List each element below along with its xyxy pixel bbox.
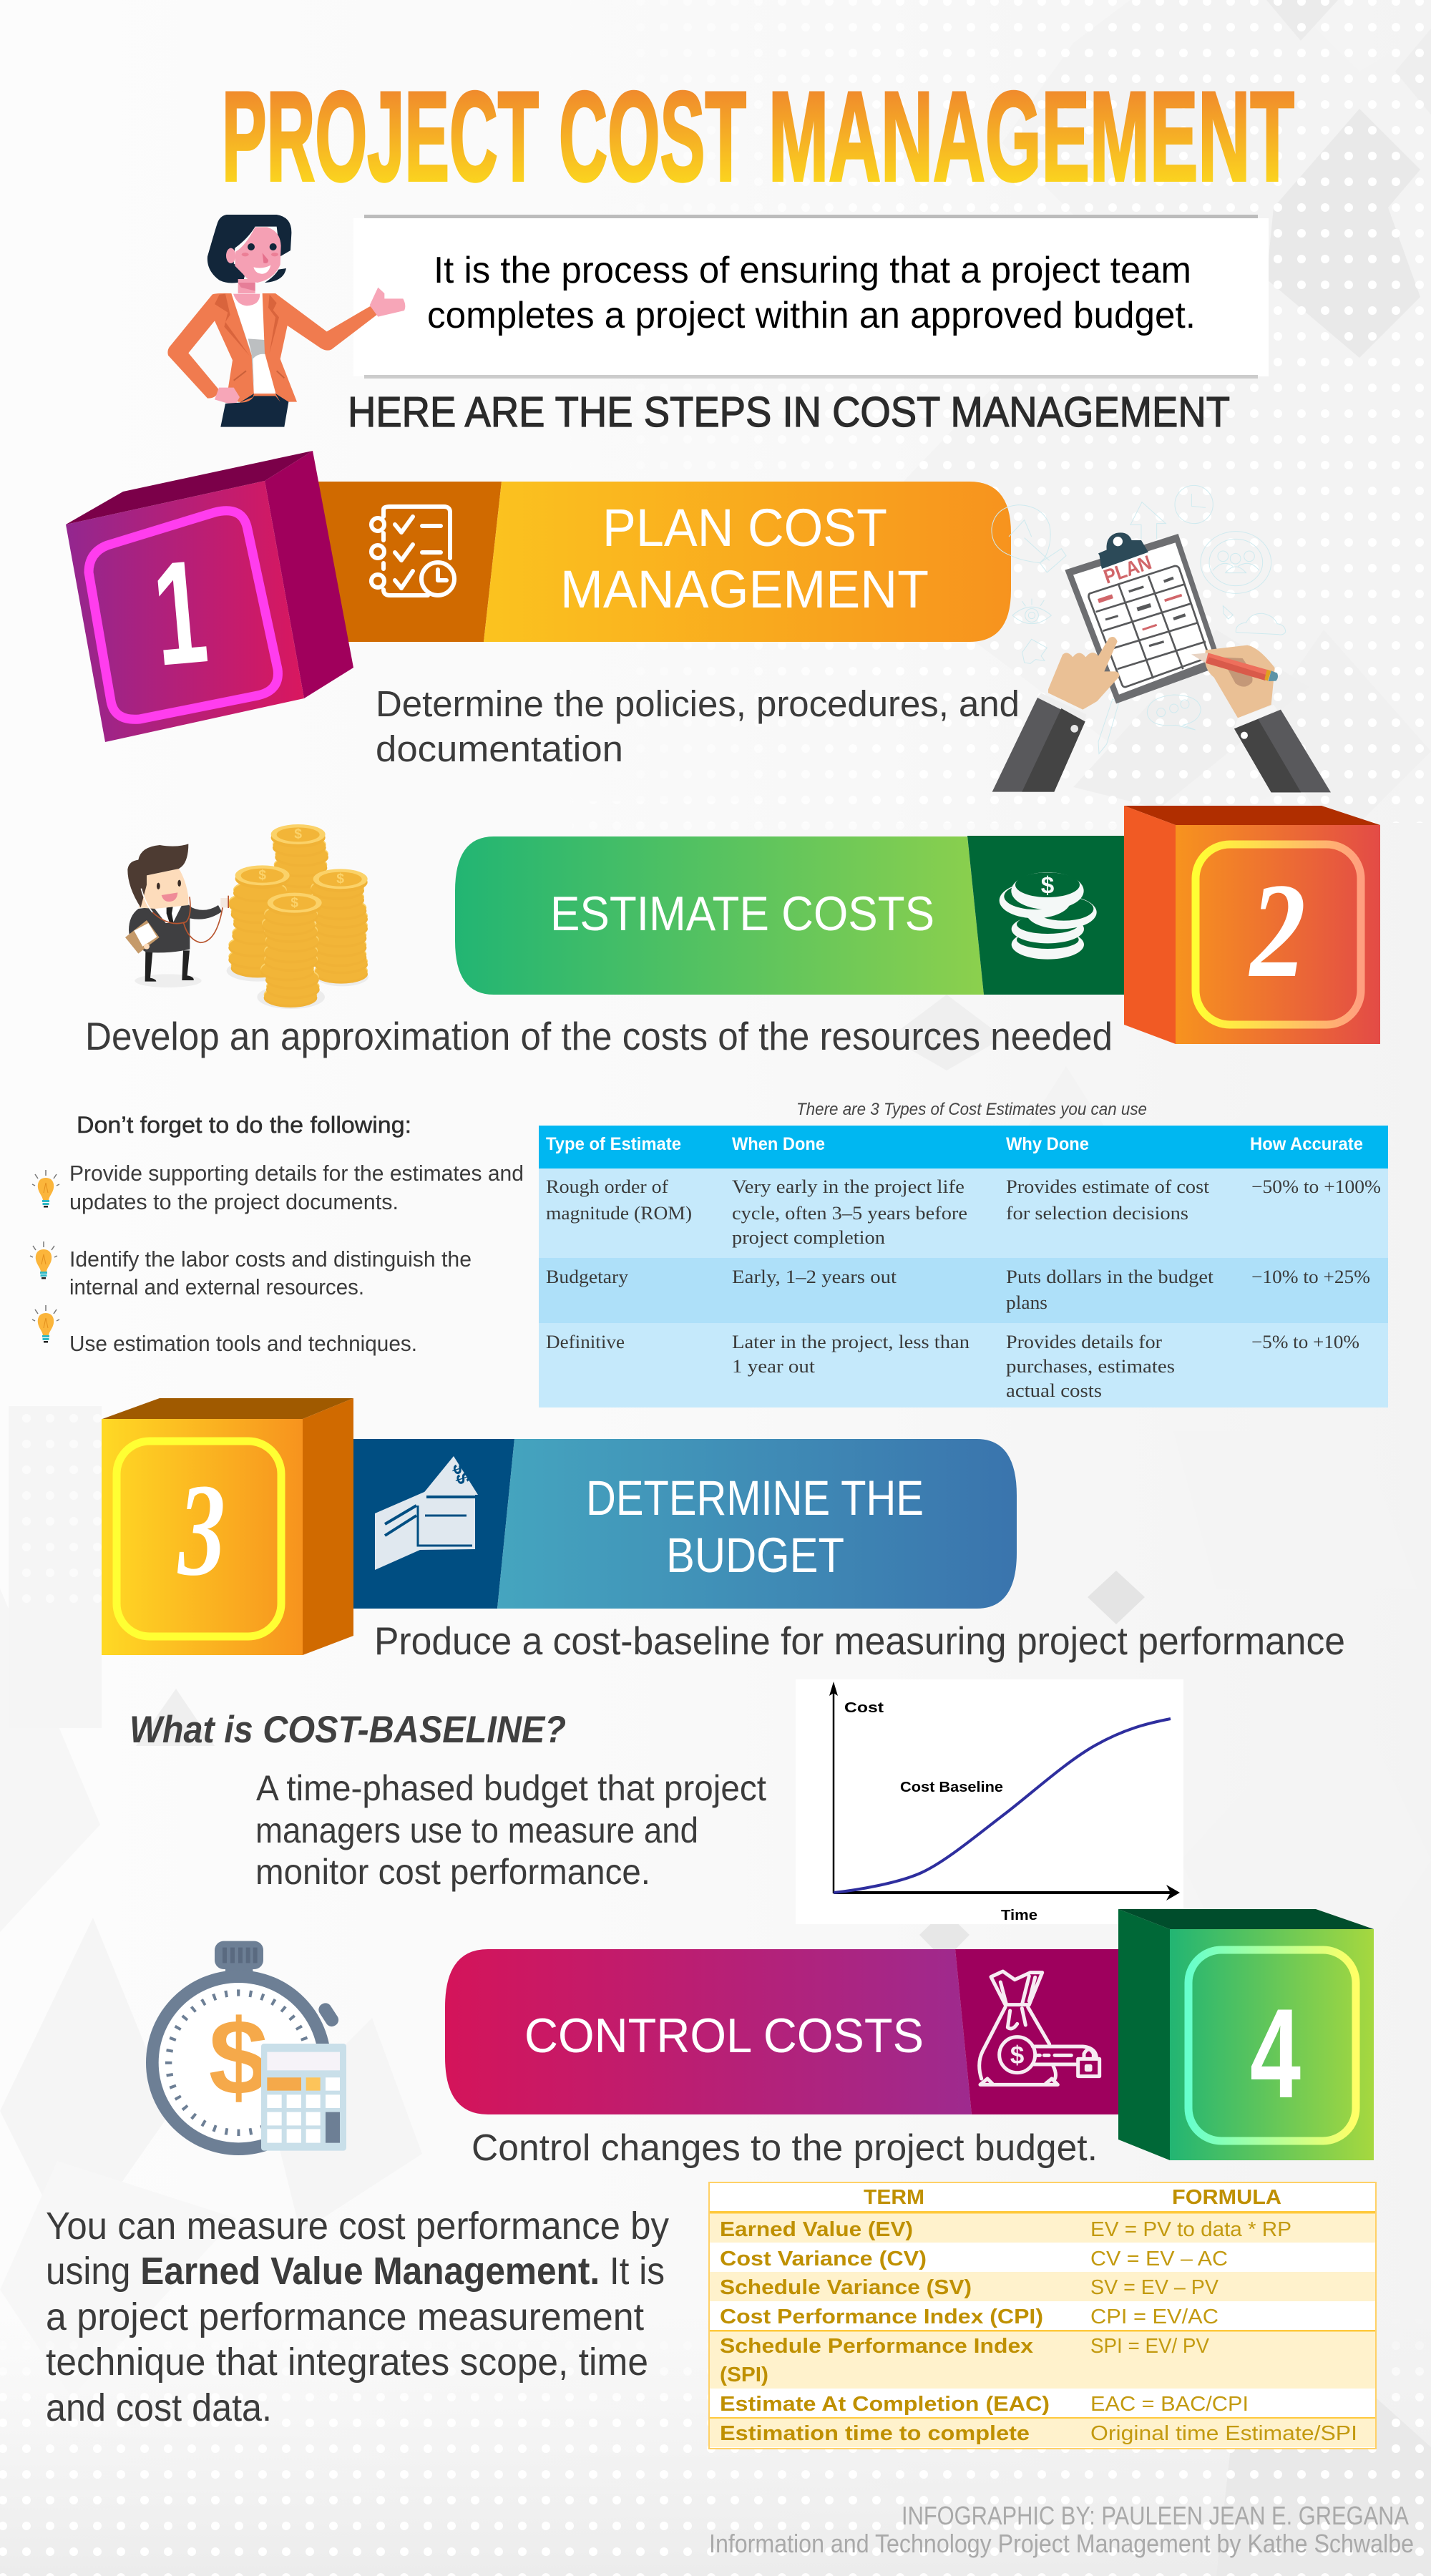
- table: types of cost estimates: plans: [1006, 1292, 1047, 1313]
- coin stacks: $: [290, 895, 298, 910]
- tip 2: Identify the labor costs and distinguish the: [69, 1246, 472, 1272]
- tip 1: updates to the project documents.: [69, 1189, 399, 1214]
- number cube 4: [1118, 1909, 1374, 2160]
- definition text: [255, 1768, 766, 1892]
- step 1 banner: [315, 482, 1011, 642]
- icon: bulb 2: [30, 1241, 57, 1279]
- table: types of cost estimates: −50% to +100%: [1251, 1176, 1381, 1197]
- table: earned value formulas: Schedule Variance (SV): [720, 2276, 972, 2299]
- number cube 2: [1124, 806, 1380, 1044]
- table: earned value formulas: TERM: [864, 2186, 924, 2209]
- earned value text: a project performance measurement: [46, 2296, 644, 2338]
- table: types of cost estimates: purchases, estimates: [1006, 1356, 1175, 1377]
- definition text: managers use to measure and: [255, 1810, 698, 1850]
- table: earned value formulas: FORMULA: [1172, 2186, 1281, 2209]
- table: earned value formulas: Cost Variance (CV): [720, 2248, 927, 2270]
- subheading: HERE ARE THE STEPS IN COST MANAGEMENT: [348, 389, 1230, 436]
- icon: money bag and key: $: [1010, 2041, 1024, 2069]
- table: types of cost estimates: Budgetary: [546, 1267, 628, 1287]
- icon: money bag and key: [980, 1971, 1100, 2084]
- table: types of cost estimates: Rough order of: [546, 1176, 668, 1197]
- table: types of cost estimates: Type of Estimate: [546, 1134, 681, 1154]
- coin stacks: $: [258, 868, 266, 883]
- table: earned value formulas: Estimate At Completion (EAC): [720, 2393, 1050, 2416]
- table: earned value formulas: SV = EV – PV: [1090, 2276, 1219, 2299]
- table: earned value formulas: Earned Value (EV): [720, 2218, 913, 2241]
- heading: [560, 498, 929, 619]
- heading: [586, 1470, 924, 1583]
- illustration: stopwatch with calculator: [146, 1941, 346, 2155]
- chart: cost baseline curve: Time: [1001, 1908, 1037, 1923]
- coin stacks: $: [336, 872, 344, 887]
- table: types of cost estimates: When Done: [732, 1134, 825, 1154]
- step 1 description: Determine the policies, procedures, and: [376, 683, 1020, 724]
- step 3 banner: [351, 1439, 1017, 1609]
- table: types of cost estimates: actual costs: [1006, 1380, 1102, 1401]
- heading: ESTIMATE COSTS: [550, 887, 934, 941]
- right hand, pencil and sleeve: [1205, 645, 1275, 718]
- tip 1: Provide supporting details for the estimates and: [69, 1161, 524, 1186]
- businessman: [125, 844, 229, 982]
- chart: cost baseline curve: [796, 1679, 1183, 1924]
- illustration: plan clipboard with hands: [992, 485, 1331, 792]
- tip 3: Use estimation tools and techniques.: [69, 1331, 417, 1356]
- table: earned value formulas: CPI = EV/AC: [1090, 2306, 1218, 2328]
- coin stacks: [228, 824, 368, 1008]
- tip 2: [69, 1246, 472, 1299]
- table: earned value formulas: SPI = EV/ PV: [1090, 2335, 1210, 2358]
- step 1 description: [376, 683, 1020, 769]
- earned value text: and cost data.: [46, 2386, 272, 2429]
- icon: checklist: [371, 507, 454, 595]
- table: earned value formulas: [709, 2182, 1376, 2449]
- clipboard: [1065, 534, 1222, 703]
- heading: DETERMINE THE: [586, 1470, 924, 1526]
- table: earned value formulas: (SPI): [720, 2363, 768, 2386]
- table: types of cost estimates: for selection decisions: [1006, 1203, 1188, 1224]
- table: types of cost estimates: Definitive: [546, 1332, 625, 1352]
- illustration: stopwatch with calculator: $: [209, 1997, 268, 2117]
- table: earned value formulas: Original time Estimate/SPI: [1090, 2422, 1357, 2445]
- cost baseline definition: [130, 1709, 766, 1892]
- coin stacks: $: [294, 827, 302, 842]
- checklist heading: Don’t forget to do the following:: [77, 1112, 411, 1138]
- heading: PLAN COST: [602, 498, 887, 557]
- table: types of cost estimates: Provides details for: [1006, 1332, 1162, 1352]
- table: types of cost estimates: project completion: [732, 1227, 885, 1248]
- heading: CONTROL COSTS: [524, 2009, 924, 2063]
- table: types of cost estimates: Why Done: [1006, 1134, 1089, 1154]
- chart: cost baseline curve: Cost Baseline: [900, 1780, 1003, 1795]
- faint doodle icons: [992, 485, 1286, 753]
- table: types of cost estimates: magnitude (ROM): [546, 1203, 692, 1224]
- table: types of cost estimates: 1 year out: [732, 1356, 816, 1377]
- number cube 3: 3: [177, 1457, 225, 1604]
- table: earned value formulas: Schedule Performance Index: [720, 2335, 1033, 2358]
- heading: What is COST-BASELINE?: [130, 1709, 566, 1751]
- step 2 description: Develop an approximation of the costs of the resources needed: [85, 1014, 1113, 1058]
- icon: wallet: [375, 1456, 478, 1570]
- step 4 banner: [445, 1949, 1123, 2114]
- heading: MANAGEMENT: [560, 560, 929, 619]
- intro callout: completes a project within an approved budget.: [427, 295, 1196, 336]
- number cube 3: [102, 1398, 353, 1655]
- intro callout: [353, 215, 1269, 379]
- step 2 banner: [455, 836, 1127, 995]
- table: types of cost estimates: [539, 1126, 1388, 1407]
- table: types of cost estimates: Provides estimate of cost: [1006, 1176, 1210, 1197]
- table: types of cost estimates: −5% to +10%: [1251, 1332, 1359, 1352]
- table: types of cost estimates: Puts dollars in the budget: [1006, 1267, 1214, 1287]
- number cube 4: 4: [1250, 1982, 1301, 2124]
- icon: bulb 3: [32, 1305, 59, 1342]
- intro callout: It is the process of ensuring that a project team: [434, 250, 1191, 291]
- earned value text: [46, 2205, 669, 2429]
- table: types of cost estimates: −10% to +25%: [1251, 1267, 1370, 1287]
- table: types of cost estimates: Very early in the project life: [732, 1176, 964, 1197]
- table: earned value formulas: Cost Performance Index (CPI): [720, 2306, 1043, 2328]
- table: earned value formulas: EAC = BAC/CPI: [1090, 2393, 1249, 2416]
- definition text: monitor cost performance.: [255, 1852, 650, 1892]
- title: COST: [559, 65, 746, 208]
- definition text: A time-phased budget that project: [256, 1768, 766, 1808]
- calculator: [261, 2044, 346, 2151]
- table: earned value formulas: CV = EV – AC: [1090, 2248, 1228, 2270]
- step 1 description: documentation: [376, 728, 623, 769]
- number cube 2: 2: [1249, 856, 1306, 1006]
- number cube 1: 1: [147, 529, 213, 697]
- table: types of cost estimates: Later in the project, less than: [732, 1332, 970, 1352]
- title: PROJECT: [222, 65, 539, 208]
- table caption: There are 3 Types of Cost Estimates you can use: [796, 1100, 1147, 1119]
- title: [222, 65, 1294, 208]
- footer credits: [709, 2501, 1414, 2558]
- illustration: businessman checking coins: [125, 824, 368, 1009]
- checklist panel: [30, 1112, 524, 1356]
- heading: BUDGET: [666, 1528, 844, 1583]
- left hand and sleeve: [1048, 637, 1119, 710]
- step 3 description: Produce a cost-baseline for measuring project performance: [374, 1619, 1345, 1663]
- illustration: presenter woman: [167, 215, 405, 427]
- illustration: plan clipboard with hands: PLAN: [1101, 551, 1154, 588]
- table: types of cost estimates: cycle, often 3–5 years before: [732, 1203, 967, 1224]
- table: types of cost estimates: How Accurate: [1250, 1134, 1363, 1154]
- table: types of cost estimates: Early, 1–2 years out: [732, 1267, 897, 1287]
- step 4 description: Control changes to the project budget.: [472, 2127, 1098, 2169]
- icon: coins: [1000, 872, 1097, 960]
- earned value text: technique that integrates scope, time: [46, 2341, 648, 2384]
- icon: coins: $: [1041, 872, 1055, 899]
- tip 1: [69, 1161, 524, 1214]
- icon: wallet: $$: [448, 1460, 475, 1487]
- icon: bulb 1: [32, 1170, 59, 1208]
- number cube 1: [66, 451, 353, 742]
- table: earned value formulas: Estimation time to complete: [720, 2422, 1030, 2445]
- earned value text: You can measure cost performance by: [46, 2205, 669, 2248]
- chart: cost baseline curve: Cost: [844, 1700, 884, 1716]
- tip 2: internal and external resources.: [69, 1274, 364, 1299]
- earned value text: using Earned Value Management. It is: [46, 2250, 665, 2293]
- table: earned value formulas: EV = PV to data * RP: [1090, 2218, 1291, 2241]
